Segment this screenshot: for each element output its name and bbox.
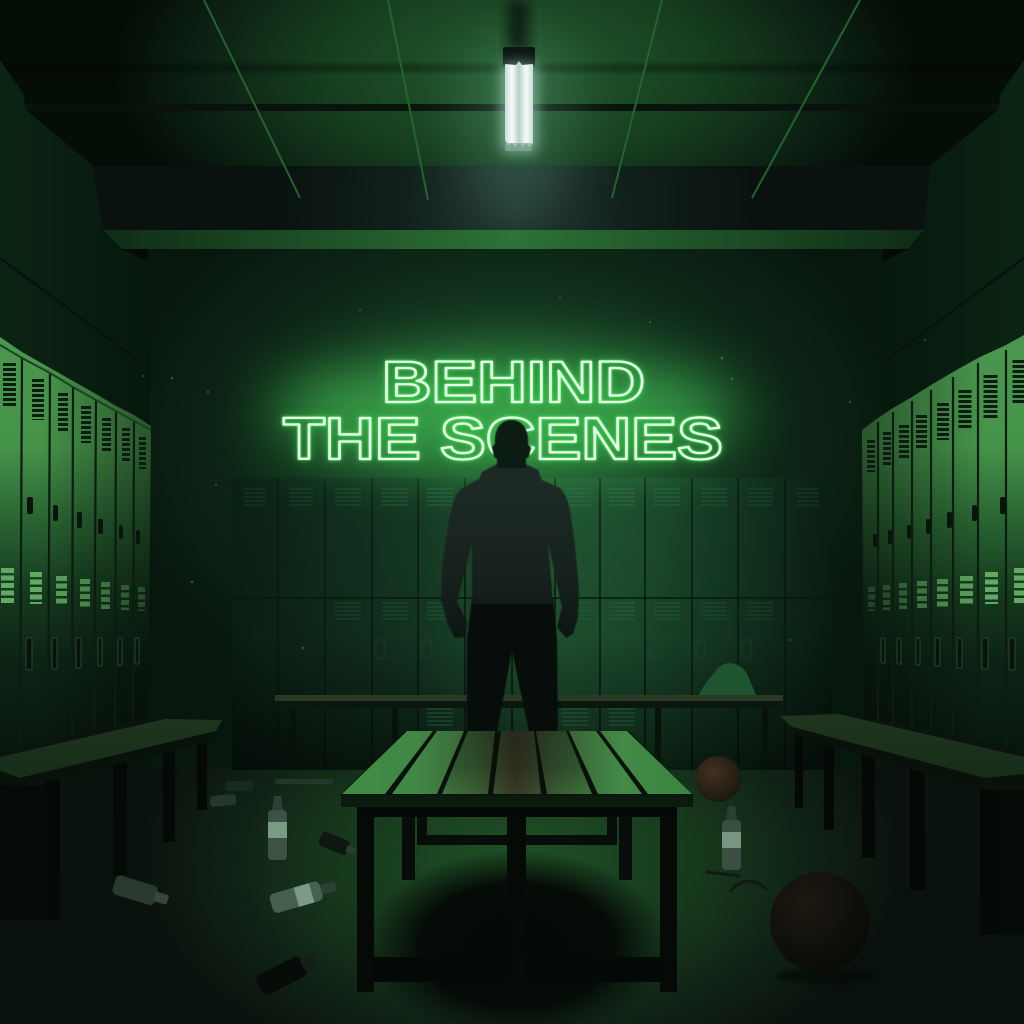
lamp end cap [505, 143, 532, 151]
fluorescent lamp [500, 0, 538, 154]
basketball small [695, 756, 741, 802]
left shadow under lockers [0, 712, 150, 935]
locker far fade [862, 335, 1024, 750]
dark bottle on floor [254, 949, 321, 997]
lamp mount [503, 47, 535, 66]
door seams [878, 350, 1006, 746]
dust particles [142, 297, 926, 649]
bench front [792, 727, 1024, 790]
door seams [20, 358, 134, 748]
neon line: BEHIND: BEHIND [382, 350, 645, 415]
lower vents [8, 568, 142, 611]
locker vents [255, 488, 808, 622]
neon glow on wall [270, 360, 740, 464]
back lockers [232, 478, 832, 770]
dark ceiling strip [26, 104, 1001, 111]
hoodie [441, 464, 579, 638]
locker body [862, 335, 1024, 750]
basketball large [770, 872, 875, 984]
lower locker vents [440, 708, 622, 726]
apron [357, 806, 676, 817]
legs [467, 598, 558, 732]
right side wall [882, 60, 1024, 930]
right locker bank [862, 335, 1024, 750]
locker body [0, 337, 151, 752]
upper vents [10, 363, 142, 469]
bottle upright right [722, 806, 741, 870]
left bench [0, 719, 222, 920]
bottle on floor left [111, 874, 171, 910]
back wall [148, 249, 883, 774]
bench seat [780, 714, 1024, 778]
legs [357, 807, 677, 992]
lower vents [872, 568, 1019, 611]
left side wall [0, 60, 150, 930]
lamp shadow [507, 0, 529, 50]
upper handles [27, 497, 140, 544]
bottom rail [357, 957, 676, 982]
upper handles [873, 497, 1006, 547]
top edge highlight [0, 345, 151, 430]
light glow [463, 35, 573, 205]
floor [0, 768, 1024, 1024]
back bench [275, 695, 783, 766]
person silhouette [441, 420, 579, 732]
neon sign [283, 350, 723, 472]
back rail and uprights [402, 815, 632, 880]
front face [341, 794, 693, 807]
left locker bank [0, 337, 151, 752]
right bench [780, 714, 1024, 935]
locker far fade [0, 337, 151, 752]
green beam [103, 230, 924, 249]
head [492, 420, 531, 468]
small bottles far [210, 779, 333, 807]
table floor shadow [367, 850, 667, 1024]
dark beam [93, 166, 930, 231]
planks [342, 731, 692, 794]
ceiling pipes [204, 0, 860, 200]
bench legs [795, 730, 1024, 935]
ceiling shadow band [0, 64, 1024, 72]
ceiling [0, 0, 1024, 260]
bench legs [0, 735, 207, 920]
neon line: THE SCENES: THE SCENES [283, 406, 723, 472]
towel on bench [699, 663, 756, 695]
locker latches [376, 640, 751, 658]
right shadow under lockers [882, 712, 1024, 940]
hood [480, 464, 541, 500]
bottle near table [318, 831, 358, 859]
table [340, 731, 693, 1024]
bottle on floor center [269, 876, 338, 914]
right wall pipe [884, 258, 1024, 362]
cord scraps on floor [706, 872, 767, 892]
lamp tube [505, 61, 533, 147]
bottle upright left [268, 796, 287, 860]
locker dividers [232, 478, 832, 770]
bench front [0, 731, 216, 785]
bench seat [0, 719, 222, 778]
plank shading [442, 731, 592, 794]
lower handles [881, 638, 1015, 670]
locker vertical shade [232, 478, 832, 770]
gaps between planks [340, 731, 693, 795]
upper vents [871, 360, 1019, 472]
tube glow [500, 62, 538, 154]
lower handles [26, 638, 139, 670]
left wall pipe [0, 258, 140, 362]
